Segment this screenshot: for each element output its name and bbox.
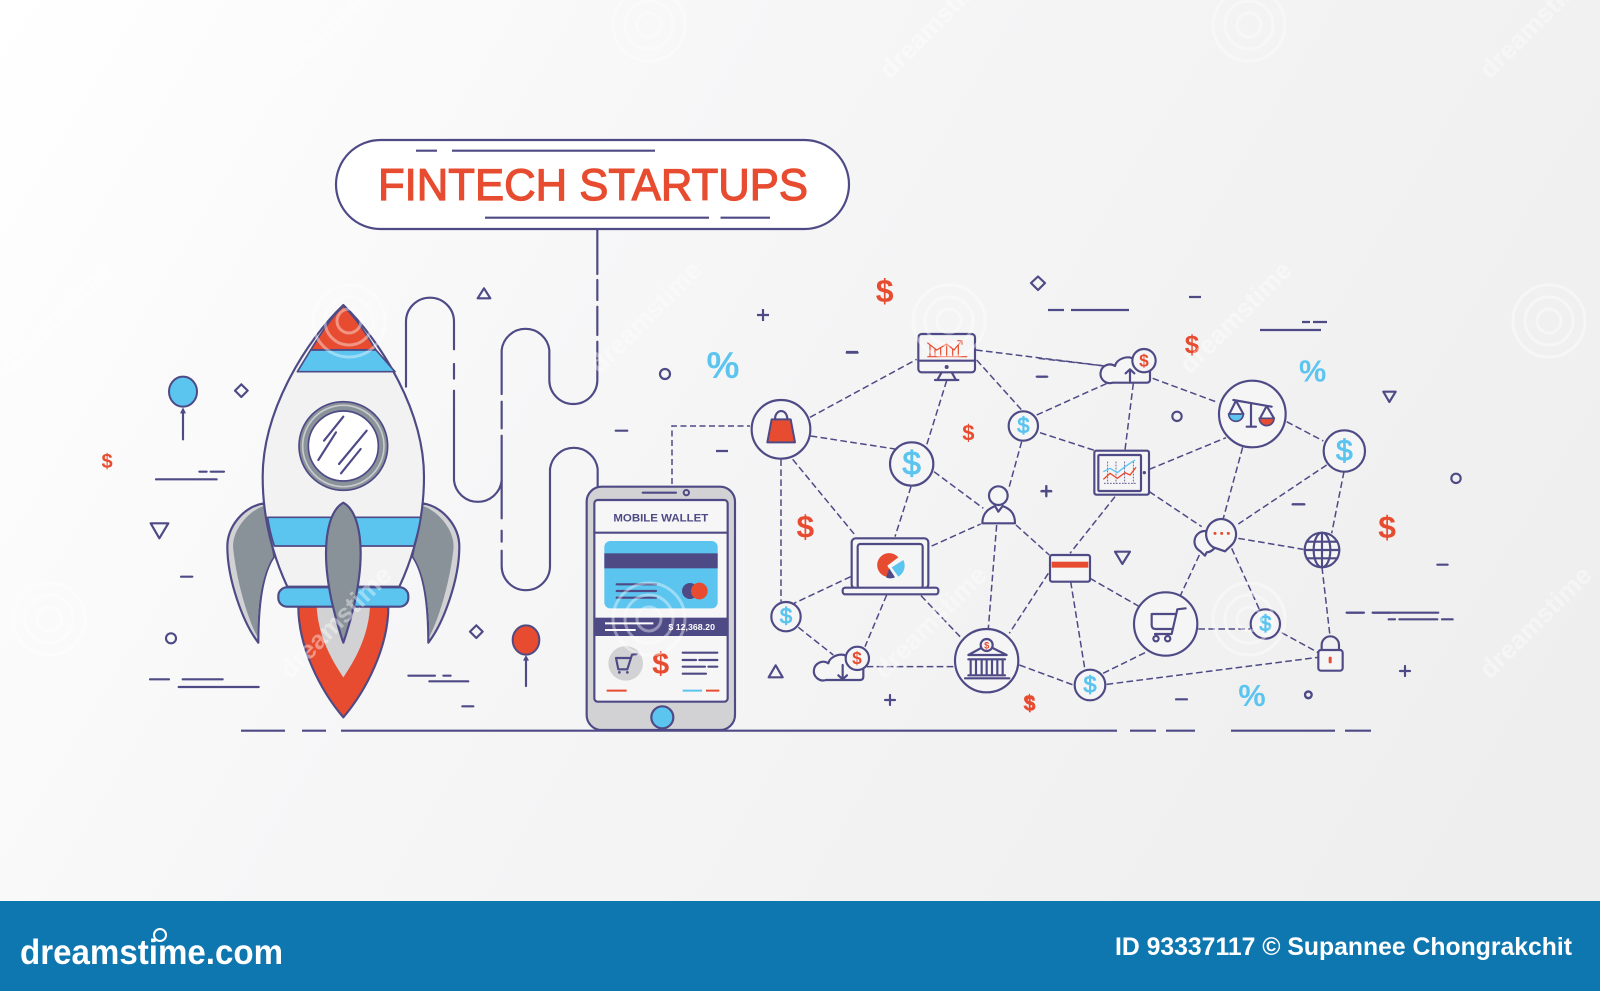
rocket center fin: [326, 503, 361, 643]
icon: cloud download: $: [852, 648, 862, 668]
icon: person: [982, 486, 1015, 523]
network left half: [752, 334, 1107, 715]
network right half: [1037, 329, 1390, 713]
far right decorations: [1293, 392, 1461, 698]
rocket base ring: [278, 587, 408, 607]
upper decorations: [660, 273, 1327, 451]
title pill: [336, 140, 849, 229]
phone dollar sign: $: [652, 646, 669, 680]
rocket left wing: [227, 503, 274, 643]
icon: bank: $: [984, 641, 990, 651]
phone credit card: [604, 541, 718, 608]
rocket upper stripe: [297, 350, 395, 372]
rocket right wing: [413, 503, 459, 643]
watermark swirls: dreamstime: [868, 560, 992, 684]
decorations inside network right: %: [1238, 679, 1266, 713]
rocket: [227, 305, 459, 717]
footer image id and author: ID 93337117 © Supannee Chongrakchit: [1115, 933, 1573, 961]
icon: shopping cart: [1134, 592, 1197, 656]
phone cart icon: [608, 646, 643, 681]
decorations inside network right: %: [1299, 355, 1326, 389]
icon: cloud upload: $: [1139, 350, 1149, 370]
icon: dollar coin small right: [1251, 609, 1280, 639]
dashed connector from phone to network: [672, 426, 750, 484]
decorations inside network left: $: [1023, 690, 1035, 715]
icon: dollar coin upper: $: [1017, 413, 1029, 438]
watermark swirls: dreamstime: [583, 255, 707, 379]
decorations inside network left: [769, 353, 1051, 715]
icon: dollar coin upper: [1009, 411, 1038, 441]
icon: shopping bag: [752, 400, 810, 459]
icon: laptop with pie chart: [843, 538, 938, 594]
icon: bank: [955, 629, 1018, 692]
network links left: [781, 350, 1107, 685]
rocket lower stripe: [268, 517, 421, 546]
watermark swirls: dreamstime: [1173, 255, 1297, 379]
icon: dollar coin right: $: [1336, 435, 1353, 468]
red dollar sign, bottom: $: [1024, 694, 1036, 716]
phone balance bar: [594, 618, 728, 636]
small shapes and dashes: [150, 288, 627, 706]
icon: globe: [1305, 533, 1339, 567]
decorations inside network right: [1037, 329, 1390, 713]
left decorations: [150, 288, 627, 706]
watermark swirls: dreamstime: [1473, 560, 1597, 684]
icon: blue balloon: [169, 377, 197, 439]
icon: dollar coin lower left: [771, 602, 801, 631]
title pill: FINTECH STARTUPS: [378, 161, 808, 210]
rocket flame: [298, 607, 388, 717]
watermark swirls: [0, 0, 1597, 684]
phone text lines: [683, 653, 717, 674]
phone balance bar: $ 12,368.20: [668, 623, 716, 632]
decorations inside network left: $: [962, 420, 974, 445]
icon: chat bubbles: [1194, 519, 1236, 556]
decorations inside network right: $: [1185, 329, 1200, 359]
footer logo: dreamstime.com: [20, 933, 283, 972]
upper decorations: $: [876, 273, 894, 309]
tube connecting title, rocket and phone: [406, 229, 598, 590]
icon: dollar coin bottom: $: [1084, 671, 1097, 697]
icon: balance scale: [1219, 381, 1286, 447]
red dollar sign, left: $: [101, 451, 113, 473]
watermark swirls: dreamstime: [273, 560, 397, 684]
phone home button: [651, 706, 673, 728]
phone heading: MOBILE WALLET: [613, 513, 709, 525]
icon: cloud upload: [1101, 349, 1156, 383]
icon: dollar coin small right: $: [1259, 611, 1271, 636]
phone accent bars: [607, 688, 719, 694]
icon: padlock: [1318, 636, 1343, 671]
rocket nose cone: [311, 306, 376, 350]
ground line: [241, 730, 1371, 732]
footer band: [0, 901, 1600, 991]
rocket window: [299, 402, 388, 490]
network links right: [1039, 358, 1344, 684]
icon: tablet with chart: [1094, 451, 1149, 495]
icon: dollar coin large: [890, 442, 933, 486]
far right decorations: $: [1378, 509, 1396, 545]
icon: monitor with chart: [918, 334, 975, 380]
icon: dollar coin bottom: [1075, 670, 1105, 700]
upper decorations: %: [707, 345, 739, 386]
icon: dollar coin right: [1324, 430, 1365, 472]
decorations inside network left: $: [797, 508, 815, 544]
icon: red balloon: [513, 625, 539, 686]
phone: mobile wallet: [587, 487, 735, 730]
icon: dollar coin large: $: [902, 446, 921, 483]
icon: dollar coin lower left: $: [780, 604, 792, 629]
icon: cloud download: [814, 647, 869, 680]
icon: credit card: [1050, 555, 1090, 582]
rocket body: [263, 305, 424, 587]
